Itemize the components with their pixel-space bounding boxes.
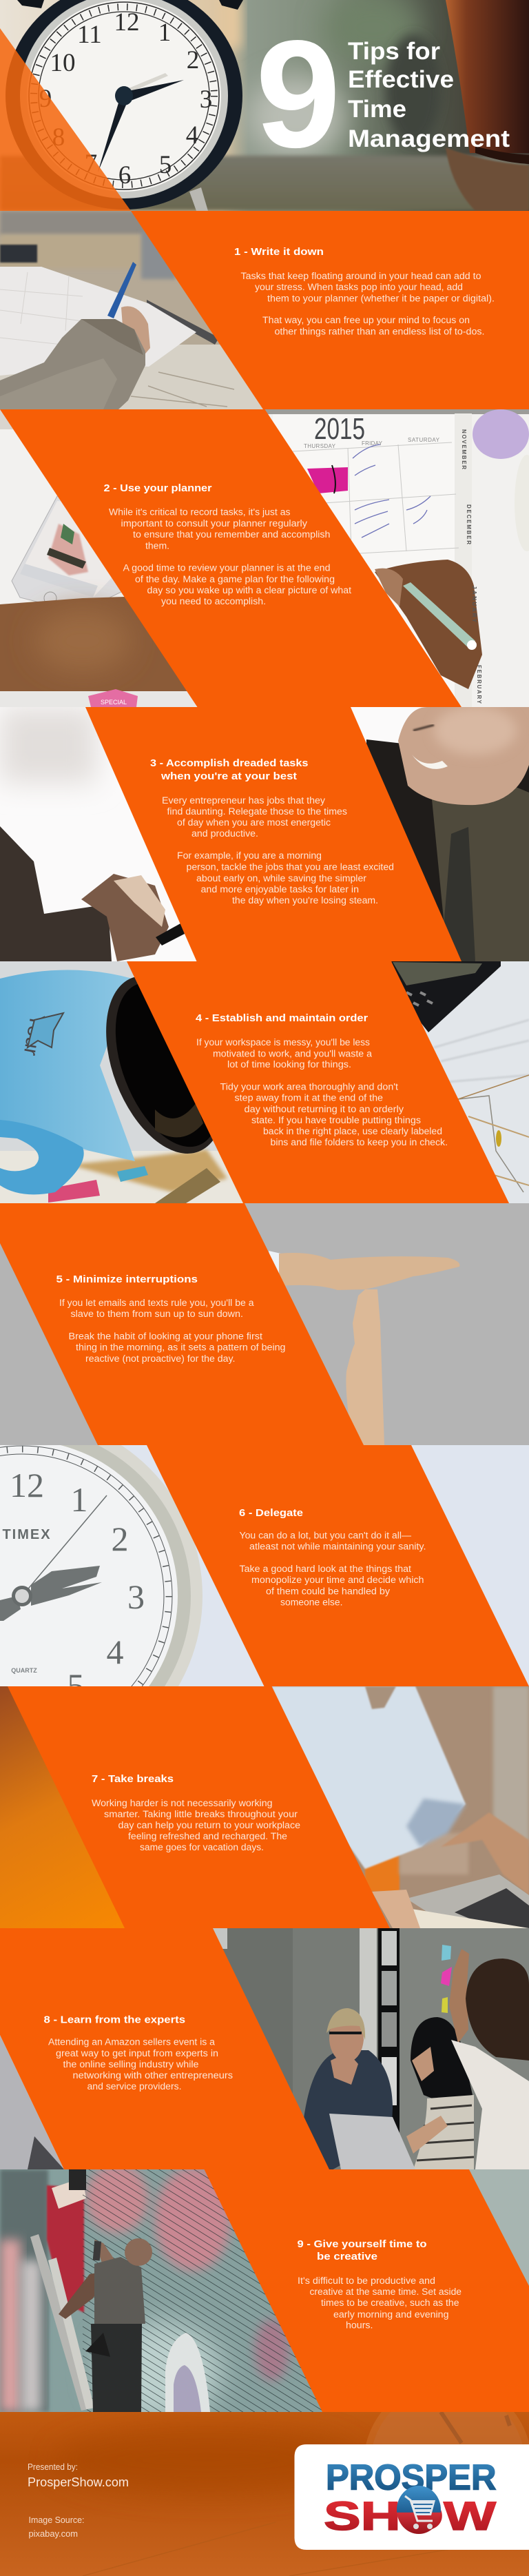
photo: planner, phone and arm (0, 409, 529, 707)
body text: If your workspace is messy, you'll be less (196, 1037, 370, 1047)
body text: creative at the same time. Set aside (310, 2287, 461, 2297)
body text: Take a good hard look at the things that (240, 1564, 411, 1574)
photo: Timex wall clock (0, 1445, 529, 1686)
photo: handshake and smiling man (0, 706, 529, 961)
panel: tip 3 (0, 706, 529, 961)
body text (59, 1298, 285, 1364)
body text (92, 1798, 300, 1852)
orange band (131, 211, 529, 409)
orange band (0, 1928, 329, 2169)
orange band (8, 1686, 390, 1928)
body text: someone else. (280, 1597, 343, 1607)
icon: shopping cart globe (397, 2486, 441, 2534)
orange band (204, 2169, 529, 2412)
body text: atleast not while maintaining your sanity. (249, 1541, 426, 1552)
body text: state. If you have trouble putting things (251, 1115, 421, 1125)
body text: about early on, while saving the simpler (196, 873, 367, 883)
panel: tip 7 (0, 1686, 529, 1930)
body text: A good time to review your planner is at the end (123, 562, 331, 573)
body text (109, 507, 351, 606)
heading (298, 2238, 427, 2262)
body text (196, 1037, 448, 1147)
logo card (295, 2444, 529, 2550)
body text: While it's critical to record tasks, it's just as (109, 507, 291, 517)
panel: hero header (0, 0, 529, 211)
body text: back in the right place, use clearly labeled (263, 1126, 442, 1136)
body text: You can do a lot, but you can't do it all— (240, 1530, 412, 1541)
heading: be creative (317, 2251, 377, 2262)
body text: It's difficult to be productive and (298, 2276, 435, 2286)
photo: planner, phone and arm: THURSDAY (304, 443, 336, 449)
body text: Break the habit of looking at your phone first (69, 1331, 262, 1341)
body text: That way, you can free up your mind to focus on (262, 315, 470, 325)
heading: 4 - Establish and maintain order (196, 1012, 368, 1024)
body text: times to be creative, such as the (321, 2298, 459, 2308)
orange band (0, 409, 461, 707)
logo card: SHOW (324, 2494, 496, 2539)
photo: hands making time-out sign (0, 1203, 529, 1445)
photo: Timex wall clock: 5 (68, 1666, 84, 1705)
orange band (85, 707, 461, 961)
photo: planner, phone and arm: DECEMBER (466, 504, 472, 546)
body text: of day when you are most energetic (177, 817, 331, 828)
body text: same goes for vacation days. (140, 1842, 264, 1852)
pale right corner (469, 2169, 529, 2412)
photo: alarm clock on table (0, 0, 529, 211)
presenter credits (28, 2462, 129, 2489)
body text: of the day. Make a game plan for the following (135, 574, 335, 584)
photo: alarm clock on table: 3 (200, 85, 212, 114)
body text: Working harder is not necessarily working (92, 1798, 273, 1808)
photo: Timex wall clock: QUARTZ (11, 1667, 37, 1674)
photo: Timex wall clock: TIMEX (2, 1527, 52, 1542)
photo: team meeting (0, 1928, 529, 2171)
photo: Timex wall clock: 3 (127, 1577, 145, 1616)
body text: and productive. (191, 828, 258, 839)
photo: alarm clock on table: 6 (118, 161, 131, 190)
body text (240, 1530, 426, 1607)
body text: great way to get input from experts in (56, 2048, 218, 2058)
photo: Timex wall clock: 2 (112, 1520, 128, 1558)
body text (48, 2037, 233, 2092)
logo card: PROSPER (326, 2457, 496, 2497)
body text: day can help you return to your workplace (118, 1820, 300, 1830)
body text: smarter. Taking little breaks throughout your (104, 1809, 298, 1819)
body text: hours. (346, 2320, 373, 2331)
body text: the day when you're losing steam. (232, 895, 378, 906)
body text: step away from it at the end of the (234, 1093, 383, 1103)
image source credits (29, 2515, 84, 2539)
photo: alarm clock on table: 1 (158, 19, 171, 47)
body text (162, 795, 394, 906)
body text: the online selling industry while (63, 2059, 198, 2069)
photo: alarm clock on table: 2 (187, 46, 199, 74)
photo: alarm clock on table: 10 (50, 49, 76, 77)
orange band (0, 1203, 364, 1445)
photo: man at laptop (0, 1686, 529, 1930)
big number nine: 9 (256, 9, 340, 180)
body text: person, tackle the jobs that you are least excited (186, 861, 394, 872)
body text: motivated to work, and you'll waste a (213, 1049, 373, 1059)
body text: you need to accomplish. (161, 596, 266, 606)
panel: footer (0, 2412, 529, 2576)
photo: spilled mug, calculator and papers: Your (19, 1012, 49, 1057)
photo: alarm clock on table: 12 (114, 8, 139, 37)
image source credits: Image Source: (29, 2515, 84, 2525)
body text: and more enjoyable tasks for later in (201, 884, 359, 895)
image source credits: pixabay.com (29, 2528, 78, 2539)
panel: tip 9 (0, 2164, 529, 2419)
body text: Attending an Amazon sellers event is a (48, 2037, 216, 2047)
orange band (127, 961, 509, 1203)
photo: planner, phone and arm: JANUARY (471, 586, 477, 624)
body text: feeling refreshed and recharged. The (128, 1831, 287, 1841)
body text: them to your planner (whether it be paper or digital). (267, 294, 495, 303)
panel: tip 5 (0, 1203, 529, 1445)
panel: tip 8 (0, 1928, 529, 2171)
title: Effective (348, 66, 454, 93)
panel: tip 4 (0, 959, 529, 1203)
photo: planner, phone and arm: SPECIAL (101, 699, 127, 706)
panel: tip 1 (0, 211, 529, 409)
body text (298, 2276, 461, 2331)
photo: alarm clock on table: 8 (52, 123, 65, 152)
body text: of them could be handled by (266, 1586, 390, 1596)
footer background (0, 2412, 529, 2576)
photo: alarm clock on table: 7 (85, 150, 97, 178)
photo: planner, phone and arm: NOVEMBER (461, 429, 467, 471)
body text: Tidy your work area thoroughly and don't (220, 1082, 398, 1092)
heading: 2 - Use your planner (103, 482, 212, 494)
body text: Tasks that keep floating around in your head can add to (241, 271, 481, 281)
body text: networking with other entrepreneurs (73, 2070, 233, 2081)
body text: day without returning it to an orderly (244, 1104, 404, 1114)
body text: lot of time looking for things. (227, 1059, 351, 1070)
body text: thing in the morning, as it sets a pattern of being (76, 1342, 285, 1352)
body text: Every entrepreneur has jobs that they (162, 795, 325, 806)
photo: Timex wall clock: 1 (70, 1480, 88, 1519)
presenter credits: Presented by: (28, 2462, 78, 2472)
body text: reactive (not proactive) for the day. (85, 1353, 236, 1364)
heading: 1 - Write it down (234, 246, 324, 258)
panel: tip 2 (0, 409, 529, 707)
photo: planner, phone and arm: FRIDAY (362, 440, 383, 447)
body text: If you let emails and texts rule you, you'll be a (59, 1298, 254, 1308)
heading: when you're at your best (160, 770, 297, 782)
body text: early morning and evening (333, 2309, 449, 2320)
body text: them. (145, 540, 169, 551)
body text: day so you wake up with a clear picture of what (147, 585, 351, 595)
photo: planner, phone and arm: FEBRUARY (476, 665, 482, 705)
heading: 8 - Learn from the experts (44, 2014, 185, 2026)
body text: monopolize your time and decide which (251, 1575, 424, 1585)
photo: alarm clock on table: 11 (77, 21, 102, 49)
title: Tips for (348, 38, 440, 65)
photo: alarm clock on table: 4 (186, 121, 198, 150)
body text: bins and file folders to keep you in check. (270, 1137, 448, 1147)
photo: graffiti artist on a ladder (0, 2169, 322, 2412)
heading: 6 - Delegate (239, 1507, 303, 1519)
body text: your stress. When tasks pop into your head, add (255, 282, 463, 292)
orange band (147, 1445, 529, 1686)
body text (241, 271, 495, 336)
title: Management (348, 125, 510, 152)
photo: alarm clock on table: 5 (159, 151, 172, 179)
body text: and service providers. (87, 2081, 182, 2092)
photo: planner, phone and arm: 2015 (314, 412, 365, 446)
body text: slave to them from sun up to sun down. (70, 1309, 243, 1319)
body text: important to consult your planner regularly (121, 518, 307, 529)
photo: Timex wall clock: 4 (106, 1633, 124, 1671)
heading: 5 - Minimize interruptions (56, 1274, 198, 1285)
photo: spilled mug, calculator and papers (0, 959, 529, 1203)
translucent orange triangle (0, 28, 131, 211)
photo: hand writing in notebook (0, 211, 276, 409)
body text: other things rather than an endless list of to-dos. (274, 327, 485, 336)
heading: 7 - Take breaks (92, 1773, 174, 1785)
title: Time (348, 96, 406, 123)
body text: find daunting. Relegate those to the times (167, 806, 347, 817)
heading: 3 - Accomplish dreaded tasks (150, 757, 309, 769)
heading: 9 - Give yourself time to (298, 2238, 427, 2250)
photo: alarm clock on table: 9 (39, 85, 52, 113)
body text: to ensure that you remember and accomplish (133, 529, 331, 540)
heading (150, 757, 309, 782)
photo: planner, phone and arm: SATURDAY (408, 437, 440, 443)
body text: For example, if you are a morning (177, 850, 322, 861)
presenter credits: ProsperShow.com (28, 2475, 129, 2489)
photo: Timex wall clock: 12 (10, 1466, 44, 1504)
title (348, 38, 510, 152)
panel: tip 6 (0, 1445, 529, 1686)
